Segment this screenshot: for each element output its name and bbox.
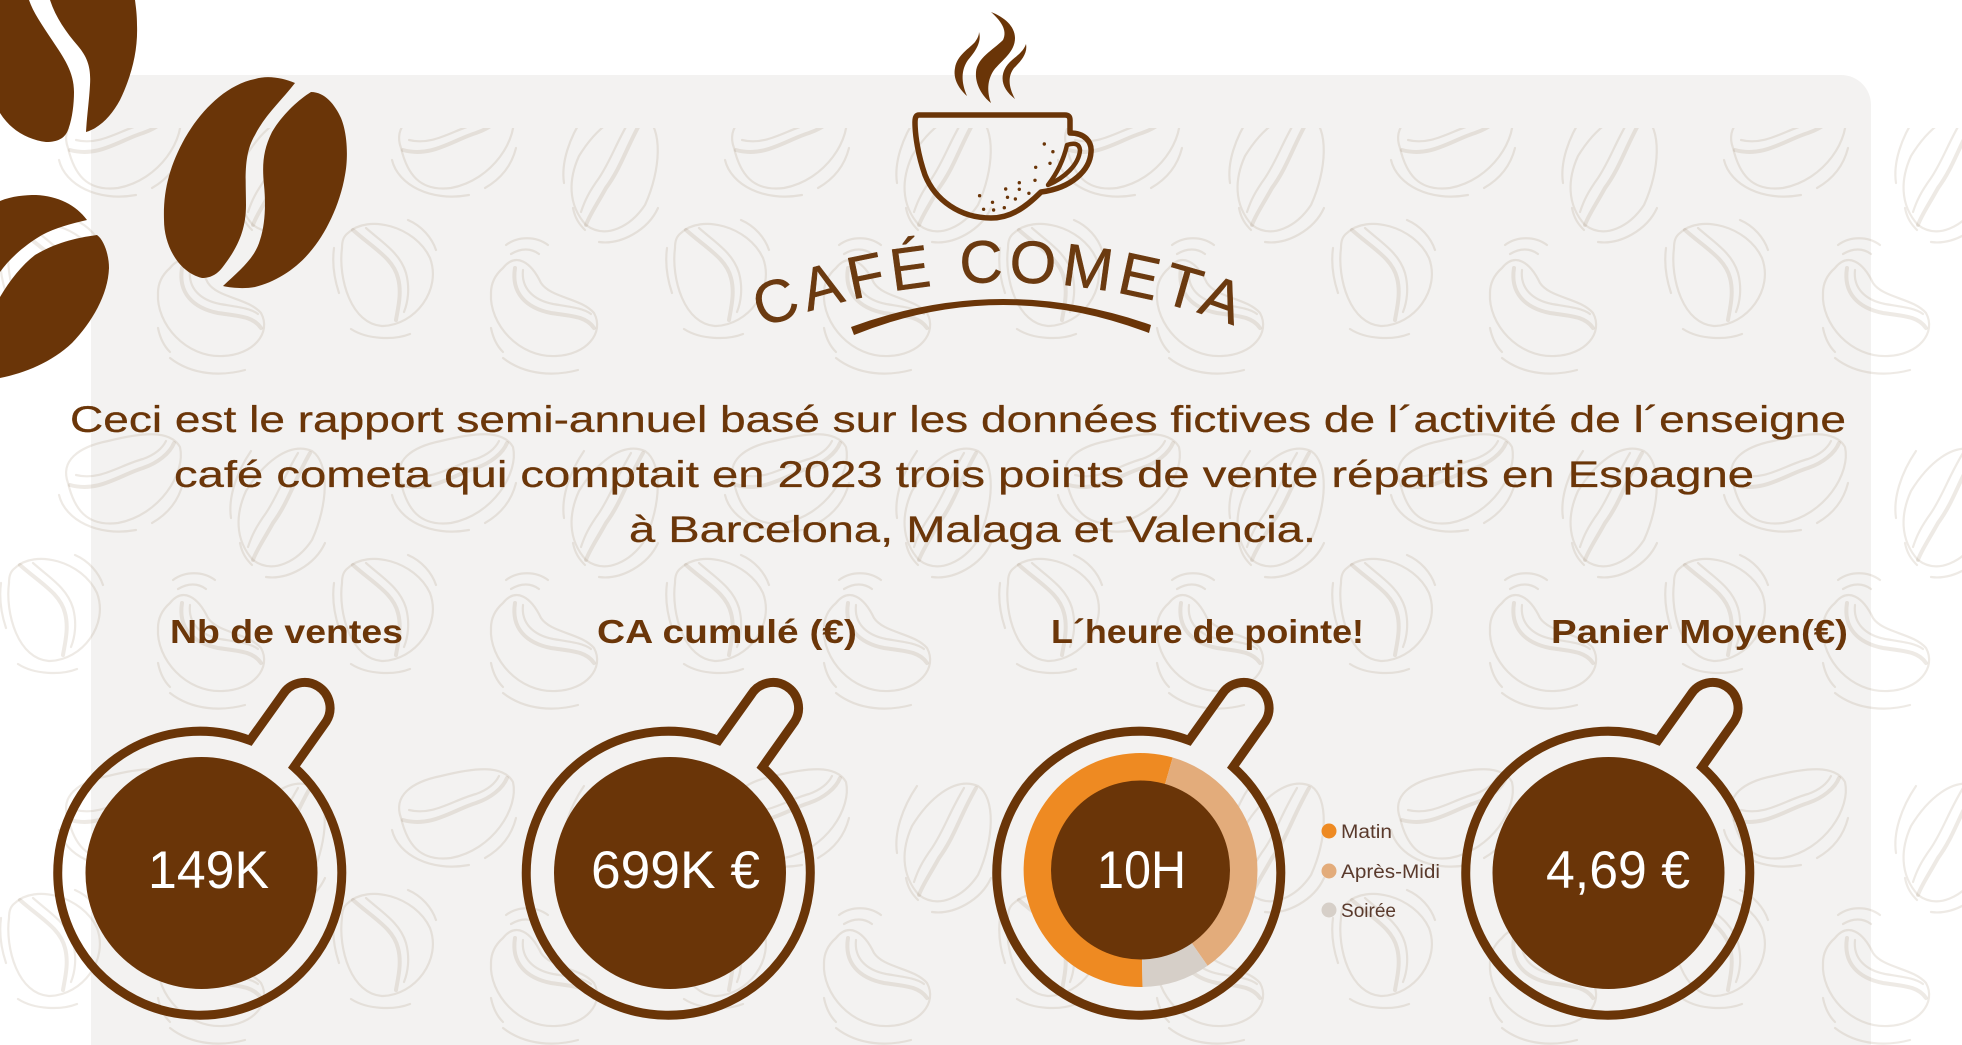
text block: introduction: Ceci est le rapport semi-annuel basé sur les données fictives de l´activité de l´enseigne <box>70 399 1846 440</box>
title underline swoosh <box>851 299 1151 335</box>
donut chart <box>1024 753 1257 987</box>
heading: L´heure de pointe! <box>1051 613 1364 650</box>
value: 699K € <box>591 841 760 900</box>
icon: mug outline <box>58 682 342 1015</box>
coffee circle <box>554 757 786 989</box>
text block: introduction: à Barcelona, Malaga et Valencia. <box>629 509 1316 550</box>
value: 10H <box>1097 841 1186 900</box>
icon: mug outline <box>1466 682 1750 1015</box>
value: 149K <box>148 841 269 900</box>
heading: Panier Moyen(€) <box>1551 613 1848 650</box>
text block: introduction: café cometa qui comptait en 2023 trois points de vente répartis en Espagne <box>174 454 1754 495</box>
icon: steam <box>955 12 1026 103</box>
logo: coffee cup with steam <box>915 12 1091 218</box>
KPI: Panier Moyen <box>1466 613 1848 1015</box>
title: CAFÉ COMETA: CAFÉ COMETA <box>756 236 1234 326</box>
legend: Après-Midi <box>1341 862 1440 883</box>
KPI: Nb de ventes <box>58 613 403 1015</box>
icon: coffee beans <box>0 0 347 378</box>
icon: cup handle inner <box>1048 144 1080 185</box>
icon: mug outline <box>997 682 1281 1015</box>
heading: Nb de ventes <box>170 613 403 650</box>
coffee circle <box>86 757 318 989</box>
legend: Matin <box>1341 822 1392 843</box>
icon: mug outline <box>526 682 810 1015</box>
KPI: heure de pointe <box>997 613 1440 1015</box>
legend <box>1322 822 1440 922</box>
text block: introduction <box>70 399 1846 550</box>
legend: Soirée <box>1341 901 1396 922</box>
KPI: CA cumulé <box>526 613 857 1015</box>
value: 4,69 € <box>1546 841 1690 900</box>
coffee circle <box>1492 757 1724 989</box>
icon: cup <box>915 115 1091 218</box>
heading: CA cumulé (€) <box>597 613 857 650</box>
cup foam dots <box>978 142 1055 212</box>
